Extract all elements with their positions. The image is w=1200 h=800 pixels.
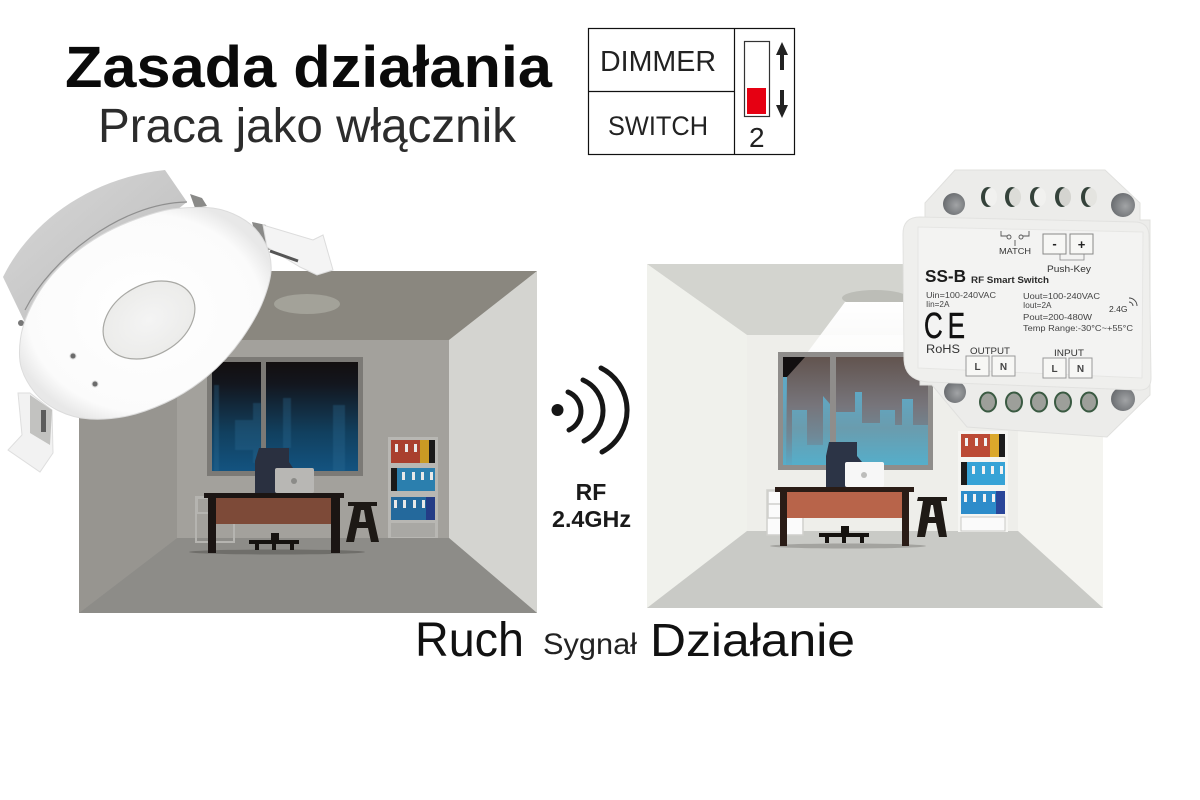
left wall	[79, 271, 177, 613]
mounting holes	[943, 193, 1135, 411]
desk	[189, 493, 365, 554]
2.4G wireless mark: 2.4G	[1109, 304, 1127, 314]
switch housing	[920, 170, 1150, 437]
caption: motion, signal, action: Działanie	[650, 614, 855, 666]
window by day	[778, 352, 933, 470]
switch number: 2	[749, 122, 765, 153]
bookshelf	[388, 437, 438, 538]
desk	[770, 487, 926, 548]
input terminals: L	[1051, 364, 1058, 375]
smart switch device SS-B	[903, 170, 1151, 437]
laptop	[845, 462, 884, 487]
output ratings: Uout=100-240VAC	[1023, 292, 1100, 301]
ceiling	[79, 271, 537, 340]
output ratings: Temp Range:-30°C~+55°C	[1023, 324, 1133, 333]
input terminals	[1043, 348, 1092, 378]
product name: SS-B	[925, 266, 966, 286]
caption: motion, signal, action	[415, 614, 855, 667]
sensor face plate	[19, 207, 271, 419]
RoHS mark: RoHS	[926, 344, 960, 356]
match symbol: MATCH	[999, 247, 1031, 256]
caption: motion, signal, action: Ruch	[415, 614, 524, 667]
RF label: 2.4GHz	[552, 506, 631, 532]
motion sensor device	[3, 170, 333, 472]
ceiling lamp	[274, 294, 340, 314]
push-key buttons: +	[1078, 237, 1086, 252]
floor	[79, 538, 537, 613]
RF label	[552, 479, 631, 532]
input terminals: N	[1077, 364, 1084, 375]
room: bright, light on	[647, 264, 1103, 608]
input terminals: INPUT	[1054, 348, 1085, 358]
drawer unit	[767, 490, 803, 535]
push-key buttons: Push-Key	[1047, 264, 1091, 275]
output terminals: L	[974, 362, 981, 373]
match symbol	[999, 231, 1031, 256]
label: switch: SWITCH	[608, 111, 708, 141]
subtitle: Praca jako włącznik	[98, 100, 517, 153]
bottom screw terminals	[980, 392, 1097, 412]
room: dark, no light	[79, 271, 537, 613]
right wall	[1018, 264, 1103, 608]
left wall	[647, 264, 747, 608]
laptop	[275, 468, 314, 493]
ceiling lamp	[842, 290, 908, 306]
arrow down	[776, 90, 788, 118]
CE mark: C	[924, 306, 943, 346]
bookshelf	[958, 431, 1008, 532]
top screw terminals	[981, 187, 1097, 207]
output ratings	[1023, 292, 1133, 333]
mounting clip left	[8, 320, 53, 472]
sensor lens	[89, 265, 209, 375]
window at night	[207, 357, 363, 476]
right wall	[449, 271, 537, 613]
label plate	[903, 217, 1151, 390]
ceiling	[647, 264, 1103, 335]
push-key buttons: -	[1052, 236, 1057, 251]
output terminals: OUTPUT	[970, 346, 1011, 356]
title: Zasada działania	[65, 35, 553, 100]
input ratings: Iin=2A	[926, 300, 950, 309]
light cone	[772, 302, 945, 400]
chair	[255, 448, 293, 493]
DIP switch diagram	[588, 28, 794, 154]
product subtitle: RF Smart Switch	[971, 275, 1049, 286]
push-key buttons	[1043, 234, 1093, 275]
input ratings: Uin=100-240VAC	[926, 291, 996, 300]
output ratings: Pout=200-480W	[1023, 313, 1092, 322]
chair	[826, 442, 862, 487]
caption: motion, signal, action: Sygnał	[543, 628, 637, 661]
2.4G wireless mark	[1109, 298, 1137, 314]
output terminals: N	[1000, 362, 1007, 373]
drawer unit	[196, 497, 234, 542]
output ratings: Iout=2A	[1023, 301, 1052, 310]
mounting clip right	[190, 194, 333, 275]
switch slot	[744, 42, 770, 116]
label: dimmer: DIMMER	[600, 46, 716, 78]
indicator holes	[70, 353, 98, 387]
output terminals	[966, 346, 1015, 376]
icon: RF signal waves	[552, 368, 627, 452]
input ratings	[926, 291, 996, 309]
arrow up	[776, 42, 788, 70]
RF label: RF	[576, 479, 606, 505]
floor	[647, 531, 1103, 608]
CE mark: E	[948, 306, 965, 346]
stool	[917, 497, 947, 537]
sensor housing	[3, 170, 187, 327]
stool	[346, 502, 379, 542]
